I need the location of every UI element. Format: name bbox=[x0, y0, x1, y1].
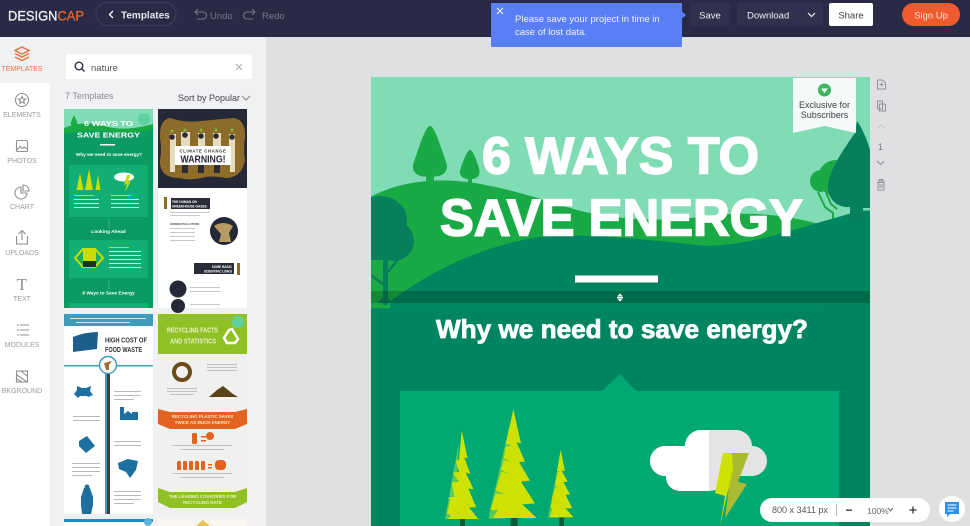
download button: Download bbox=[747, 10, 789, 22]
trees on the left hill bbox=[413, 126, 480, 183]
round tree on the left bbox=[371, 196, 414, 305]
page number: 1 bbox=[878, 142, 883, 152]
template: climate change warning: GREENHOUSE GASES bbox=[172, 204, 207, 208]
template: climate change warning: WARNING! bbox=[180, 154, 226, 166]
canvas side tools bbox=[877, 80, 886, 190]
search box bbox=[66, 54, 252, 79]
templates back button bbox=[96, 2, 176, 26]
download button bbox=[737, 3, 823, 26]
save reminder toast: case of lost data. bbox=[515, 27, 587, 38]
chat button bbox=[939, 496, 965, 522]
template: 6 ways to save energy: 6 WAYS TO bbox=[84, 119, 133, 128]
sign up button bbox=[902, 3, 960, 26]
sort control: Sort by Popular bbox=[178, 93, 240, 103]
icon: chevron down bbox=[877, 161, 884, 164]
save button bbox=[690, 3, 730, 26]
pine trees bbox=[445, 409, 574, 526]
icon: chevron up bbox=[878, 125, 884, 128]
template: 6 ways to save energy bbox=[64, 109, 153, 308]
icon: modules bbox=[17, 325, 29, 335]
icon: duplicate page bbox=[878, 101, 886, 111]
icon: elements bbox=[16, 94, 28, 106]
subscribers ribbon: Subscribers bbox=[801, 110, 849, 120]
templates back button: Templates bbox=[121, 10, 170, 22]
label: chart: CHART bbox=[10, 204, 35, 211]
label: background: BKGROUND bbox=[2, 388, 42, 395]
tree bodies bbox=[447, 409, 574, 519]
save reminder toast: Please save your project in time in bbox=[515, 14, 660, 25]
label: modules: MODULES bbox=[5, 342, 40, 349]
label: uploads: UPLOADS bbox=[5, 250, 39, 257]
template panel bbox=[50, 37, 266, 526]
template: recycling facts: RECYCLING PLASTIC SAVES bbox=[172, 414, 233, 419]
template count: 7 Templates bbox=[65, 91, 114, 101]
template: recycling facts: THE LEADING COUNTRIES FOR bbox=[169, 494, 237, 499]
template: climate change warning: THE HUMAN ON bbox=[172, 200, 197, 204]
decorative bar bbox=[575, 276, 658, 282]
round tree on the right bbox=[810, 160, 838, 219]
icon: chart bbox=[15, 185, 29, 199]
share button: Share bbox=[838, 10, 864, 22]
template: 6 ways to save energy: 6 Ways to Save Energy bbox=[82, 290, 135, 296]
tree shadows bbox=[445, 423, 559, 519]
tall tree on the right bbox=[828, 121, 870, 222]
share button bbox=[829, 3, 873, 26]
template: recycling facts: RECYCLING RATE bbox=[183, 500, 222, 505]
zoom control bar: 800 x 3411 px bbox=[772, 505, 828, 515]
label: text: TEXT bbox=[13, 296, 32, 303]
zoom control bar: 100% bbox=[867, 506, 889, 516]
icon: text: T bbox=[17, 275, 28, 294]
label: templates: TEMPLATES bbox=[1, 66, 43, 73]
undo bbox=[195, 9, 233, 22]
label: photos: PHOTOS bbox=[7, 158, 37, 165]
template: recycling facts: AND STATISTICS bbox=[170, 336, 216, 346]
template: climate change warning: SCIENTIFIC LINKS bbox=[204, 270, 232, 274]
template: recycling facts: TWICE AS MUCH ENERGY bbox=[175, 420, 230, 425]
section heading: Why we need to save energy? bbox=[436, 314, 808, 344]
hero title: 6 WAYS TO bbox=[482, 128, 759, 186]
subscribers ribbon bbox=[793, 78, 856, 133]
light hill and dark hill bbox=[370, 180, 870, 308]
template: climate change warning: GREEN POLLUTION bbox=[170, 222, 199, 226]
label: elements: ELEMENTS bbox=[3, 112, 41, 119]
template: 6 ways to save energy: Why we need to save energy? bbox=[76, 152, 142, 158]
icon: uploads bbox=[16, 230, 28, 244]
icon: photos bbox=[16, 140, 28, 152]
template: climate change warning: SOME BASIC bbox=[212, 265, 233, 269]
template: high cost of food waste bbox=[64, 314, 153, 514]
left sidebar bbox=[0, 37, 50, 526]
template: high cost of food waste: HIGH COST OF bbox=[105, 338, 148, 344]
section divider handle bbox=[371, 291, 870, 303]
template: climate change warning: CLIMATE CHANGE bbox=[180, 148, 226, 154]
undo: Undo bbox=[210, 11, 233, 22]
section panel bbox=[400, 374, 839, 526]
hero title bbox=[440, 136, 804, 237]
icon: templates layers bbox=[15, 47, 29, 60]
icon: add page bbox=[878, 80, 886, 89]
cloud with lightning bbox=[650, 430, 767, 526]
zoom control bar bbox=[760, 498, 930, 522]
subscribers ribbon: Exclusive for bbox=[799, 100, 850, 110]
icon: background bbox=[16, 371, 28, 382]
search box: nature bbox=[91, 63, 118, 74]
template: recycling facts bbox=[158, 314, 247, 514]
hero title: SAVE ENERGY bbox=[440, 190, 803, 248]
logo: DESIGNCAP bbox=[8, 8, 84, 24]
template: climate change warning bbox=[158, 109, 247, 313]
sign up button: Sign Up bbox=[914, 10, 948, 22]
save reminder toast bbox=[491, 3, 686, 47]
hero illustration bbox=[353, 77, 870, 308]
template: 6 ways to save energy: Looking Ahead bbox=[91, 229, 126, 235]
template: next row cream bbox=[158, 519, 247, 526]
template: 6 ways to save energy: SAVE ENERGY bbox=[77, 130, 140, 140]
top navigation bar bbox=[0, 0, 970, 37]
redo bbox=[244, 9, 285, 22]
icon: trash bbox=[878, 180, 884, 190]
template: high cost of food waste: FOOD WASTE bbox=[105, 347, 142, 354]
save button: Save bbox=[699, 10, 721, 22]
redo: Redo bbox=[262, 11, 285, 22]
template: next row blue bbox=[64, 518, 153, 526]
template: recycling facts: RECYCLING FACTS bbox=[167, 326, 218, 334]
design canvas bbox=[353, 77, 870, 526]
icon: diamond badge bbox=[818, 84, 831, 96]
